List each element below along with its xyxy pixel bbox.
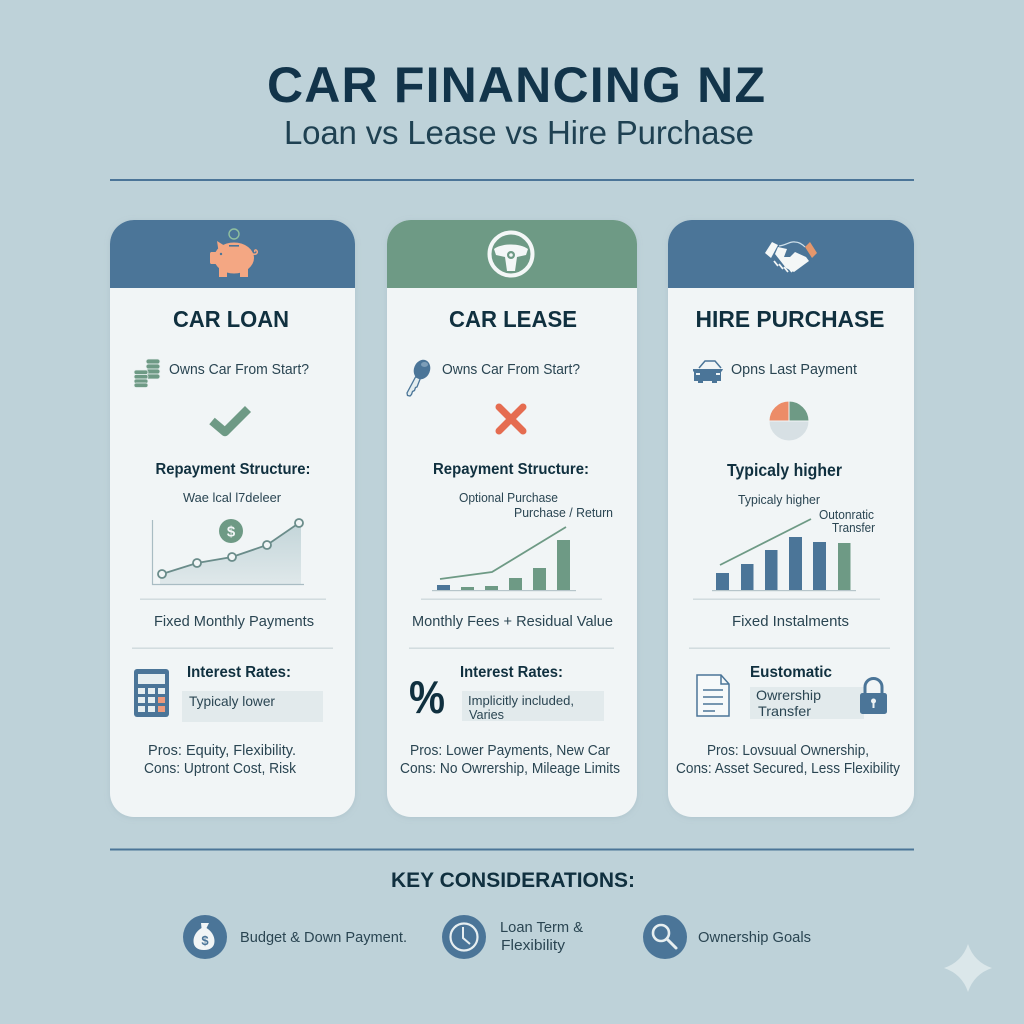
text: cons: Cons: Uptront Cost, Risk <box>144 761 297 777</box>
subtitle: Loan vs Lease vs Hire Purchase <box>284 114 754 151</box>
icon: coin stacks <box>134 359 160 388</box>
icon: pie chart <box>769 401 809 441</box>
panel: car loan <box>110 220 355 817</box>
bar chart <box>712 519 856 591</box>
text: pros: Pros: Equity, Flexibility. <box>148 743 296 759</box>
text: options last payment: Opns Last Payment <box>731 361 858 378</box>
callout: implicitly included <box>462 691 604 722</box>
icon: document <box>697 675 729 716</box>
text: budget: Budget & Down Payment. <box>240 929 407 946</box>
icon: car key <box>407 357 433 396</box>
callout: ownership transfer: Transfer <box>758 703 811 719</box>
bar chart <box>432 527 576 591</box>
chart label: optional purchase: Optional Purchase <box>459 490 558 505</box>
text: monthly fees: Monthly Fees + Residual Value <box>412 613 613 630</box>
chart label: Wae lcal l7deleer <box>183 491 281 505</box>
text: fixed instalments: Fixed Instalments <box>732 613 849 630</box>
text: loan term: Loan Term & <box>500 919 583 936</box>
text: cons: Cons: No Owrership, Mileage Limits <box>400 761 620 777</box>
text: owns car from start: Owns Car From Start? <box>169 361 309 378</box>
item: loan term <box>442 915 583 959</box>
icon: percent: % <box>409 671 445 723</box>
callout: typically lower <box>182 691 323 722</box>
callout: ownership transfer: Owrership <box>756 687 821 703</box>
icon: calculator <box>134 669 169 717</box>
text: pros: Pros: Lower Payments, New Car <box>410 743 610 759</box>
text: fixed monthly payments: Fixed Monthly Payments <box>154 613 314 630</box>
icon: money bag <box>183 915 227 959</box>
chart label: automatic transfer: Transfer <box>832 521 875 535</box>
icon: cross mark <box>499 407 523 431</box>
heading: car loan: CAR LOAN <box>173 306 289 332</box>
icon: padlock <box>860 678 887 714</box>
icon: check mark <box>212 409 248 432</box>
chart label: typically higher: Typicaly higher <box>738 492 821 507</box>
text: pros: Pros: Lovsuual Ownership, <box>707 743 869 759</box>
chart label: automatic transfer: Outonratic <box>819 508 874 522</box>
heading: automatic: Eustomatic <box>750 664 832 681</box>
heading: typically higher: Typicaly higher <box>727 460 842 480</box>
heading: interest rates: Interest Rates: <box>187 664 291 681</box>
heading: hire purchase: HIRE PURCHASE <box>696 306 884 332</box>
heading: repayment structure: Repayment Structure: <box>433 461 589 478</box>
text: ownership goals: Ownership Goals <box>698 929 811 946</box>
text: cons: Cons: Asset Secured, Less Flexibility <box>676 761 901 777</box>
callout: typically lower: Typicaly lower <box>189 693 275 709</box>
item: ownership goals <box>643 915 811 959</box>
icon: sparkle <box>944 944 992 992</box>
panel: car lease <box>387 220 637 817</box>
item: budget <box>183 915 407 959</box>
callout: ownership transfer <box>750 687 864 719</box>
callout: implicitly included: Implicitly included, <box>468 693 574 708</box>
chart label: automatic transfer <box>819 508 875 535</box>
text: flexibility: Flexibility <box>501 937 566 954</box>
panel: hire purchase <box>668 220 914 817</box>
chart label: purchase or return: Purchase / Return <box>514 505 613 520</box>
heading: car lease: CAR LEASE <box>449 306 577 332</box>
callout: implicitly included: Varies <box>469 707 504 722</box>
icon: car <box>693 361 723 383</box>
line chart <box>152 519 304 584</box>
panel header: car loan <box>110 220 355 288</box>
line chart: $ <box>227 524 236 540</box>
icon: handshake <box>765 242 817 272</box>
heading: repayment structure: Repayment Structure: <box>156 461 310 478</box>
heading: key considerations: KEY CONSIDERATIONS: <box>391 869 635 892</box>
panel header: hire purchase <box>668 220 914 288</box>
icon: money bag: $ <box>201 933 209 948</box>
panel header: car lease <box>387 220 637 288</box>
heading: interest rates: Interest Rates: <box>460 664 563 681</box>
icon: piggy bank <box>210 229 257 277</box>
icon: magnifier <box>643 915 687 959</box>
text: owns car from start: Owns Car From Start? <box>442 361 580 378</box>
title: CAR FINANCING NZ <box>267 57 765 113</box>
icon: steering wheel <box>490 232 532 276</box>
icon: clock <box>442 915 486 959</box>
